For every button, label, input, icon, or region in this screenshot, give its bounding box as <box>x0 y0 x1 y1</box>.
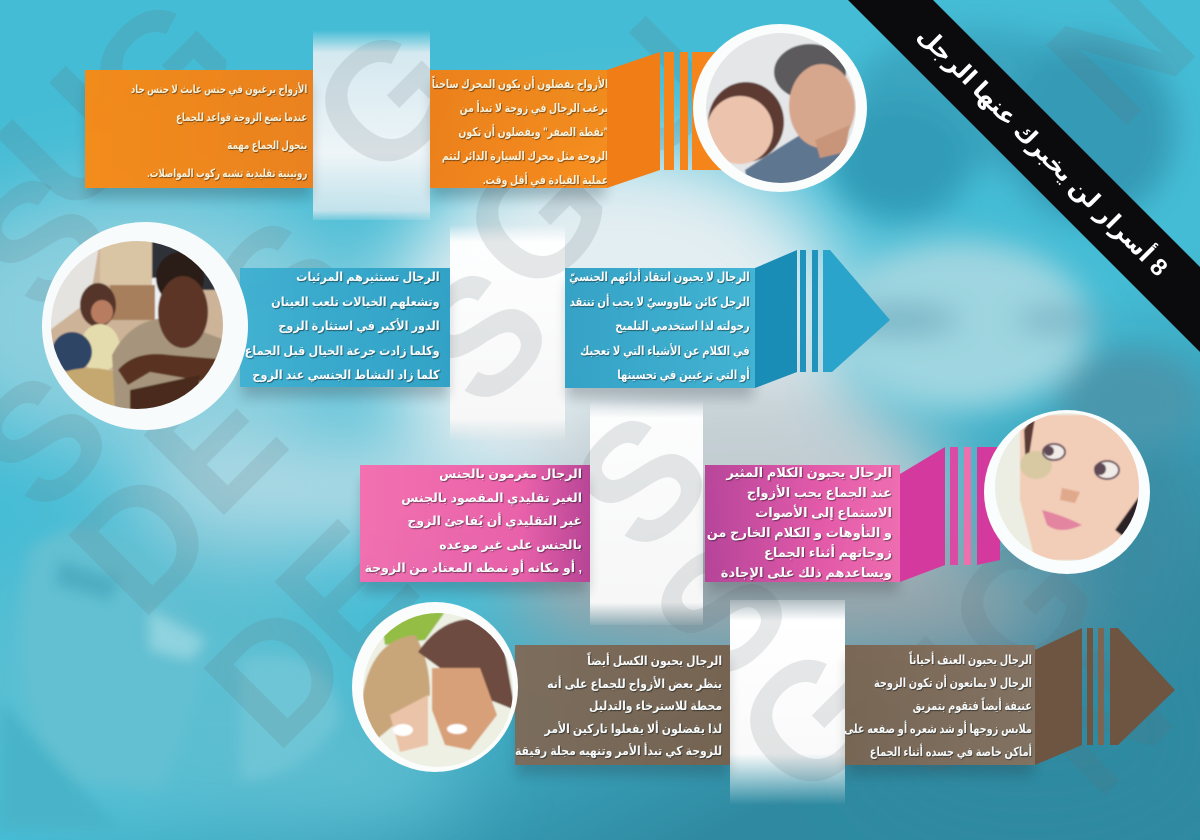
watermark: S <box>177 182 385 390</box>
panel: brown left <box>515 645 730 765</box>
text block: orange right: يرغب الرجال في زوجة لا تبدأ من <box>459 101 608 115</box>
text block: orange right: عملية القيادة في أقل وقت. <box>483 173 608 187</box>
panel: pink left <box>360 465 590 582</box>
watermark: D <box>171 567 385 781</box>
icon: woman photo 3 <box>984 410 1150 574</box>
text block: brown right: عنيفة أيضاً فتقوم بتمزيق <box>913 699 1032 713</box>
text block: blue left: الدور الأكبر في استثارة الزوج <box>279 319 440 333</box>
icon: couple photo 2 <box>42 222 248 430</box>
watermark: E <box>242 487 450 695</box>
text block: pink right: و التأوهات و الكلام الخارج من <box>707 525 892 540</box>
text block: orange right: الزوجة مثل محرك السيارة الدائر لتتم <box>442 149 608 163</box>
text block: orange right: الأزواج يفضلون أن يكون المحرك ساخناً <box>432 77 608 91</box>
text block: brown left: الرجال يحبون الكسل أيضاً <box>587 654 722 668</box>
text block: pink left: الرجال مغرمون بالجنس <box>439 467 582 481</box>
text block: brown left: للزوجة كي تبدأ الأمر وتنهيه مجلة رقيقة <box>515 744 722 758</box>
text block: pink right: زوجاتهم أثناء الجماع <box>764 545 892 560</box>
text block: blue right: الرجال لا يحبون انتقاد أدائهم الجنسيّ <box>569 270 750 284</box>
panel: orange right pencil <box>430 70 607 188</box>
text block: pink right: عند الجماع يحب الأزواج <box>747 485 892 500</box>
watermark: S <box>617 507 825 715</box>
text block: blue left <box>245 270 441 384</box>
watermark: G <box>911 497 1132 718</box>
text block: pink left: الغير تقليدي المقصود بالجنس <box>401 490 582 504</box>
text block: pink left: بالجنس على غير موعده <box>439 538 582 552</box>
man's face, lower left <box>0 527 340 830</box>
watermark: D <box>36 434 250 648</box>
text block: pink right: ويساعدهم ذلك على الإجادة <box>721 565 892 580</box>
text block: brown left: لذا يفضلون ألا يفعلوا تاركين الأمر <box>544 722 722 736</box>
text block: blue right: رجولته لذا استخدمي التلميح <box>616 319 750 333</box>
panel: blue left <box>240 268 450 387</box>
text block: blue left: الرجال تستثيرهم المرئيات <box>297 270 440 284</box>
text block: blue left: وتشعلهم الخيالات تلعب العينان <box>272 294 440 308</box>
text block: brown right: الرجال يحبون العنف أحياناً <box>909 653 1032 667</box>
text block: pink right <box>707 465 893 582</box>
panel: blue right pencil <box>565 268 755 388</box>
text block: pink left: غير التقليدي أن يُفاجئ الزوج <box>407 514 582 528</box>
text block: orange left <box>131 82 308 182</box>
text block: brown right: الرجال لا يمانعون أن تكون الزوجة <box>874 676 1032 690</box>
watermark: S <box>537 377 745 585</box>
watermark: G <box>426 107 647 328</box>
text block: brown right: أماكن خاصة في جسده أثناء الجماع <box>870 745 1032 759</box>
panel: pink right pencil <box>705 465 900 582</box>
text block: blue right: في الكلام عن الأشياء التي لا تعجبك <box>580 344 750 358</box>
text block: brown left <box>515 652 722 760</box>
text block: orange right <box>432 76 608 188</box>
text block: blue left: وكلما زادت جرعة الخيال قبل الجماع <box>245 344 440 358</box>
text block: brown left: ينظر بعض الأزواج للجماع على أنه <box>547 676 722 690</box>
text block: orange left: عندما تضع الزوجة قواعد للجماع <box>176 112 307 124</box>
icon: couple photo 1 <box>693 24 867 192</box>
title: 8 أسرار لن يخبرك عنها الرجل <box>912 22 1172 282</box>
text block: orange left: الأزواج يرغبون في جنس عابث لا جنس جاد <box>131 84 307 96</box>
text block: blue right: أو التي ترغبين في تحسينها <box>618 368 750 382</box>
text block: pink left <box>365 467 583 577</box>
text block: pink right: الرجال يحبون الكلام المثير <box>726 465 892 480</box>
watermark: G <box>700 610 921 831</box>
text block: orange left: يتحول الجماع مهمة <box>227 140 307 152</box>
text block: brown right: ملابس زوجها أو شد شعره أو صفعه على <box>844 722 1032 736</box>
watermark: N <box>992 614 1200 828</box>
panel: brown right pencil <box>845 645 1035 765</box>
text block: orange right: "نقطة الصفر" ويفضلون أن تكون <box>458 125 608 139</box>
icon: couple photo 4 <box>352 602 518 772</box>
text block: pink left: , أو مكانه أو نمطه المعتاد من الزوجة <box>365 561 582 575</box>
text block: brown right <box>844 651 1032 760</box>
man's face, upper right <box>830 30 1200 450</box>
text block: pink right: الاستماع إلى الأصوات <box>755 505 892 520</box>
text block: blue left: كلما زاد النشاط الجنسي عند الزوج <box>253 368 440 382</box>
white vertical strips <box>313 30 845 805</box>
text block: brown left: محطة للاسترخاء والتدليل <box>589 699 722 713</box>
watermark: U <box>824 604 1038 818</box>
text block: blue right: الرجل كائن طاووسيّ لا يحب أن تنتقد <box>570 294 750 308</box>
watermark: S <box>377 232 585 440</box>
text block: blue right <box>569 268 750 384</box>
watermark: E <box>111 340 319 548</box>
text block: orange left: روتينية تقليدية تشبه ركوب المواصلات. <box>147 168 307 180</box>
panel: orange left <box>85 70 313 188</box>
